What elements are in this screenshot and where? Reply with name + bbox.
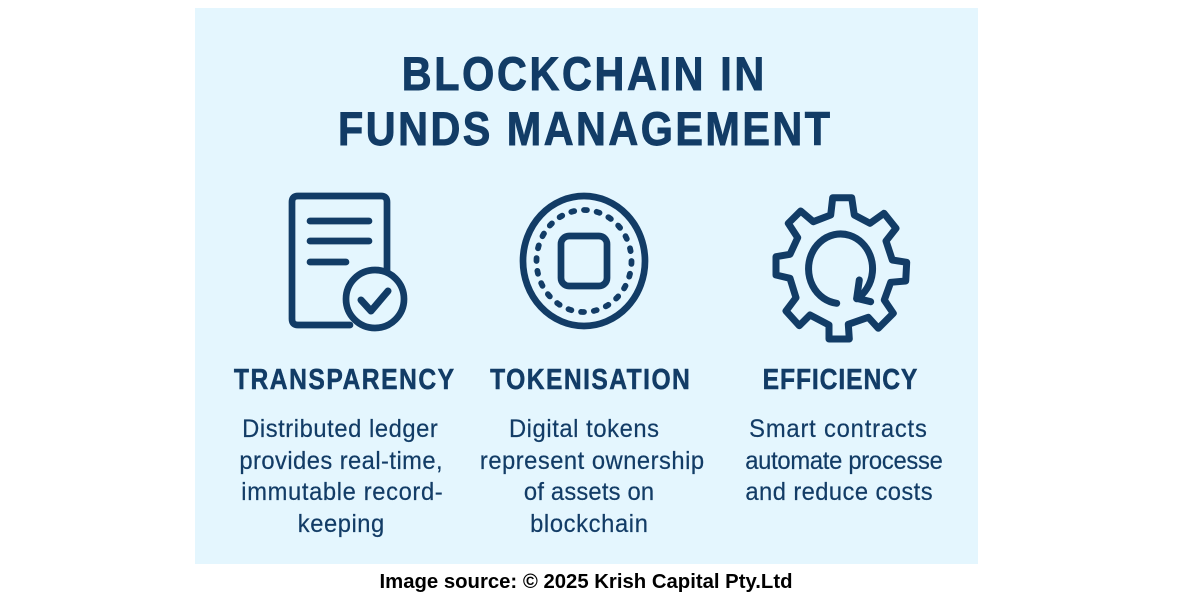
text block: transparency description: Distributed ledger bbox=[242, 415, 438, 443]
text block: tokenisation description: of assets on bbox=[524, 478, 654, 506]
heading: efficiency: EFFICIENCY bbox=[763, 363, 917, 395]
text block: tokenisation description bbox=[480, 415, 704, 538]
icon: gear with circular arrow bbox=[776, 198, 907, 339]
title bbox=[338, 49, 830, 156]
text block: efficiency description: and reduce costs bbox=[745, 478, 933, 506]
caption: image source: Image source: © 2025 Krish Capital Pty.Ltd bbox=[380, 571, 792, 593]
icon: document with check bbox=[292, 196, 404, 328]
text block: tokenisation description: blockchain bbox=[530, 510, 648, 538]
text block: transparency description: immutable record- bbox=[241, 478, 443, 506]
text block: tokenisation description: Digital tokens bbox=[509, 415, 659, 443]
icon: token coin bbox=[523, 196, 645, 326]
text block: transparency description: keeping bbox=[298, 510, 384, 538]
heading: transparency: TRANSPARENCY bbox=[234, 363, 454, 395]
title: BLOCKCHAIN IN bbox=[402, 49, 764, 101]
heading: tokenisation: TOKENISATION bbox=[490, 363, 690, 395]
title: FUNDS MANAGEMENT bbox=[338, 104, 830, 156]
text block: efficiency description: automate processe bbox=[745, 447, 943, 475]
panel: background bbox=[195, 8, 978, 564]
text block: transparency description bbox=[239, 415, 443, 538]
text block: efficiency description bbox=[745, 415, 943, 506]
text block: transparency description: provides real-time, bbox=[239, 447, 443, 475]
text block: tokenisation description: represent ownership bbox=[480, 447, 704, 475]
text block: efficiency description: Smart contracts bbox=[749, 415, 927, 443]
